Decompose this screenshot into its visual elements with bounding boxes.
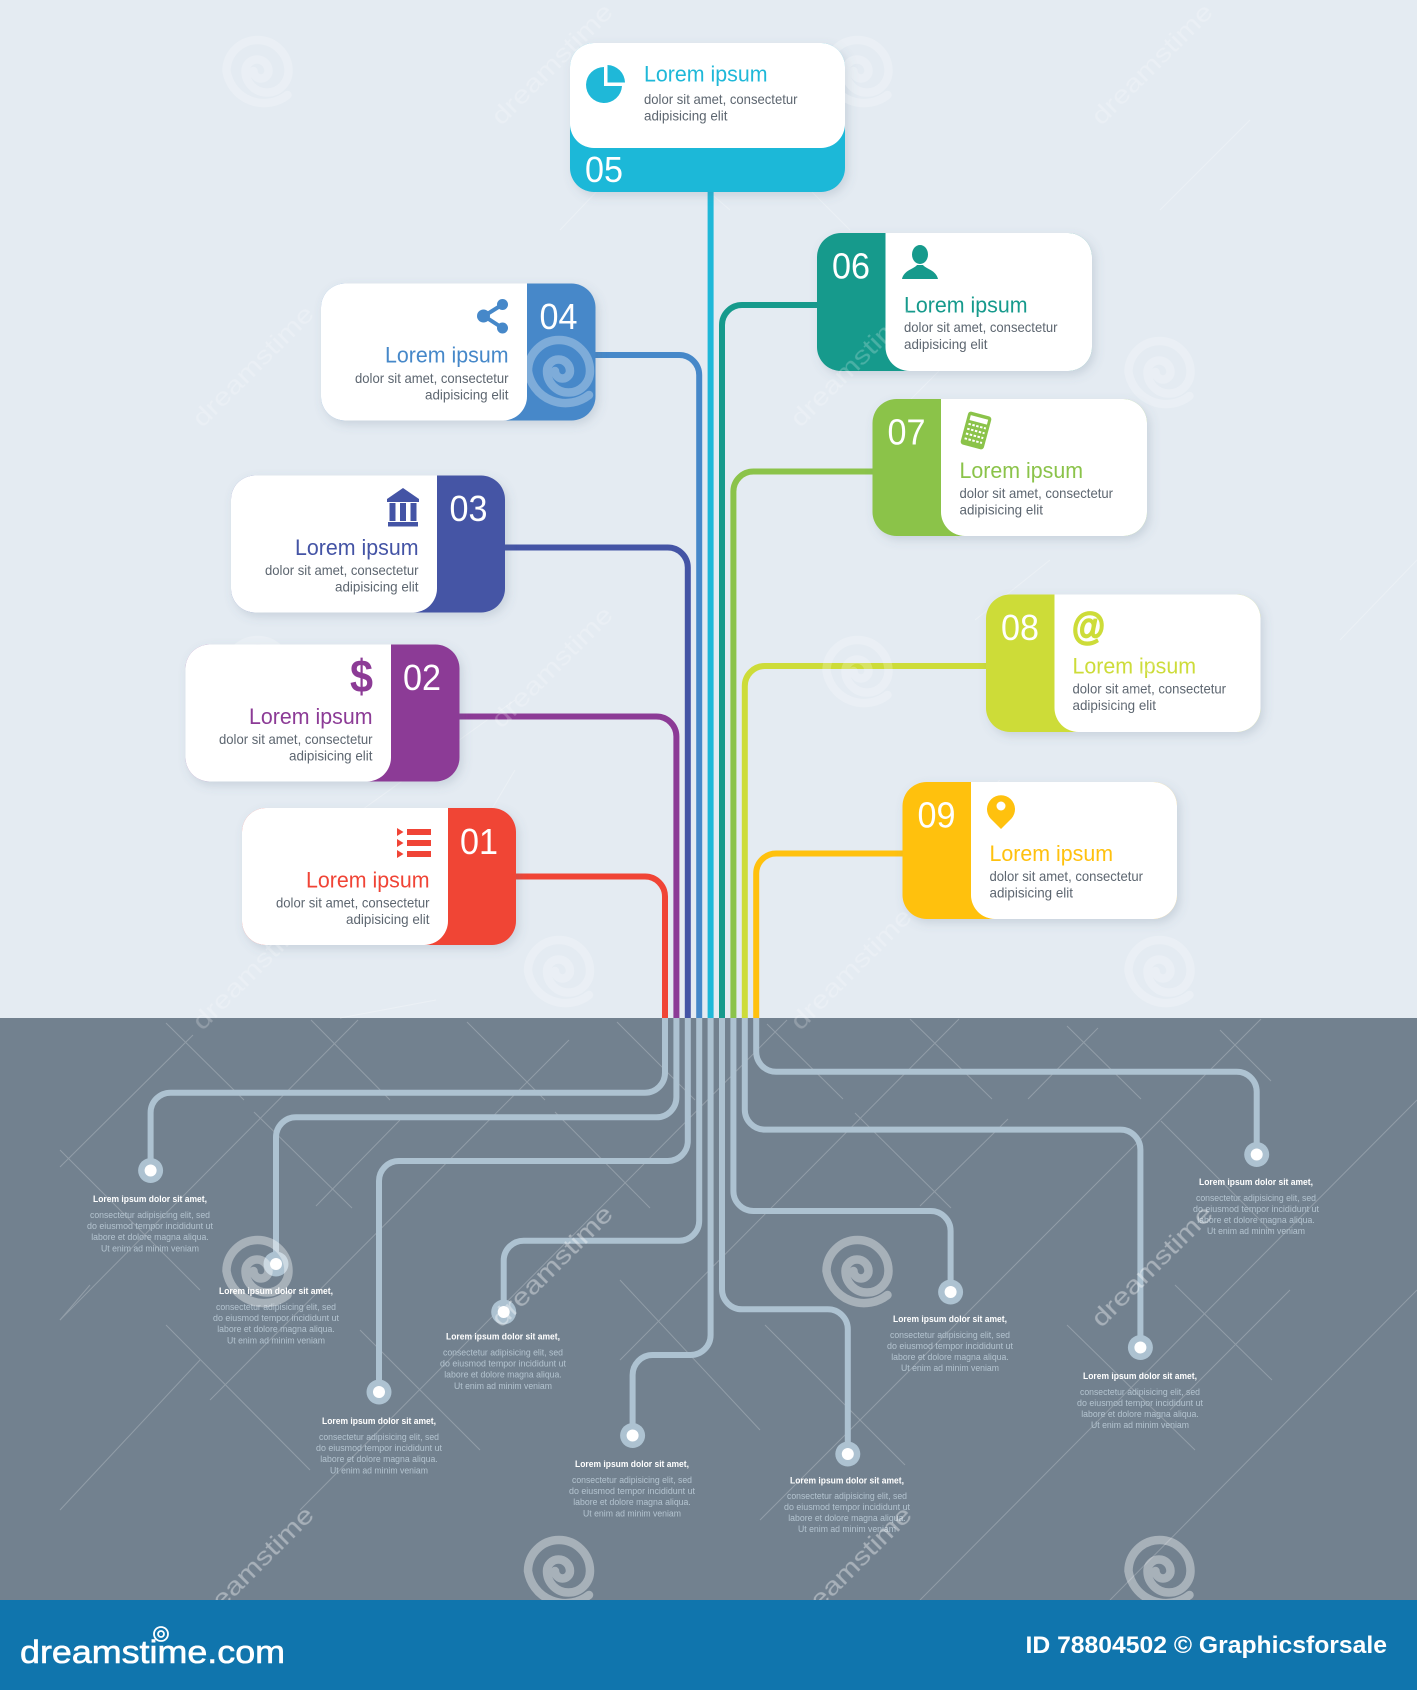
root 04	[504, 1018, 699, 1312]
icon: list	[397, 828, 431, 858]
card 06	[817, 233, 1092, 371]
root node 08 with caption	[1077, 1335, 1203, 1430]
root node 06 with caption: consectetur adipisicing elit, sed	[787, 1491, 907, 1501]
icon: calculator	[960, 411, 992, 450]
root node 09 with caption: consectetur adipisicing elit, sed	[1196, 1193, 1316, 1203]
icon: at sign: @	[1072, 606, 1105, 648]
watermark spirals	[226, 40, 1190, 1603]
root node 07 with caption: Lorem ipsum dolor sit amet,	[893, 1314, 1007, 1324]
branch 02	[455, 716, 676, 1018]
icon: dollar: $	[350, 650, 373, 702]
root node 08 with caption: Ut enim ad minim veniam	[1091, 1420, 1189, 1430]
watermark text: sky: dreamstime	[1086, 0, 1219, 131]
title: Lorem ipsum	[385, 342, 508, 368]
watermark text: sky: dreamstime	[1086, 601, 1219, 734]
root node 08 with caption: Lorem ipsum dolor sit amet,	[1083, 1371, 1197, 1381]
card 01: adipisicing elit	[346, 911, 430, 927]
root node 04 with caption: Lorem ipsum dolor sit amet,	[446, 1332, 560, 1342]
root node 08 with caption: do eiusmod tempor incididunt ut	[1077, 1398, 1203, 1408]
root node 04 with caption: Ut enim ad minim veniam	[454, 1381, 552, 1391]
description: dolor sit amet, consectetur	[355, 370, 509, 386]
icon: pie chart	[586, 65, 625, 103]
icon: map pin	[987, 795, 1015, 829]
icon: share	[477, 299, 508, 334]
root node 02 with caption: Ut enim ad minim veniam	[227, 1336, 325, 1346]
card 03: adipisicing elit	[335, 578, 419, 594]
root node 03 with caption: labore et dolore magna aliqua.	[320, 1454, 438, 1464]
root node 01 with caption: consectetur adipisicing elit, sed	[90, 1210, 210, 1220]
title: Lorem ipsum	[990, 841, 1113, 866]
watermark text: sky: dreamstime	[187, 903, 320, 1036]
root node 06 with caption: Ut enim ad minim veniam	[798, 1524, 896, 1534]
description: dolor sit amet, consectetur	[265, 562, 419, 578]
root node 07 with caption: Ut enim ad minim veniam	[901, 1363, 999, 1373]
watermark text: sky: dreamstime	[785, 903, 918, 1036]
root node 02 with caption	[213, 1252, 339, 1346]
root node 03 with caption: Ut enim ad minim veniam	[330, 1466, 428, 1476]
footer logo: dreamstime.com	[20, 1634, 285, 1670]
number: 09	[918, 794, 956, 836]
watermark text: sky: dreamstime	[785, 300, 918, 433]
watermark text: sky: dreamstime	[486, 601, 619, 734]
connector lines: branches to cards	[455, 190, 995, 1018]
branch 05	[708, 190, 714, 1018]
number: 08	[1001, 607, 1039, 648]
description: dolor sit amet, consectetur	[644, 91, 798, 107]
description: dolor sit amet, consectetur	[1072, 680, 1226, 696]
title: Lorem ipsum	[1072, 654, 1196, 678]
card 02	[186, 644, 460, 782]
root node 05 with caption: consectetur adipisicing elit, sed	[572, 1475, 692, 1485]
root node 05 with caption: labore et dolore magna aliqua.	[573, 1497, 691, 1507]
title: Lorem ipsum	[249, 704, 372, 729]
icon: bank	[387, 488, 419, 526]
root node 05 with caption: Lorem ipsum dolor sit amet,	[575, 1459, 689, 1469]
root node 09 with caption	[1193, 1142, 1319, 1236]
card 09: adipisicing elit	[990, 884, 1073, 900]
root node 04 with caption: do eiusmod tempor incididunt ut	[440, 1358, 566, 1368]
root 08	[745, 1018, 1140, 1347]
description: dolor sit amet, consectetur	[990, 868, 1143, 884]
root 03	[379, 1018, 688, 1392]
root node 06 with caption: Lorem ipsum dolor sit amet,	[790, 1476, 904, 1486]
description: dolor sit amet, consectetur	[219, 731, 373, 747]
root node 01 with caption: Lorem ipsum dolor sit amet,	[93, 1194, 207, 1204]
card 04: adipisicing elit	[425, 386, 509, 402]
root node 03 with caption: Lorem ipsum dolor sit amet,	[322, 1416, 436, 1426]
root node 06 with caption	[784, 1442, 910, 1534]
watermark text: ground: dreamstime	[785, 1501, 918, 1634]
number: 06	[832, 246, 870, 286]
card 06: adipisicing elit	[904, 336, 988, 352]
description: dolor sit amet, consectetur	[904, 319, 1058, 335]
root node 05 with caption	[569, 1423, 695, 1518]
root node 04 with caption: labore et dolore magna aliqua.	[444, 1370, 562, 1380]
root node 02 with caption: consectetur adipisicing elit, sed	[216, 1302, 336, 1312]
branch 01	[510, 876, 665, 1018]
root node 01 with caption	[87, 1158, 213, 1254]
root node 07 with caption: labore et dolore magna aliqua.	[891, 1352, 1009, 1362]
root node 02 with caption: Lorem ipsum dolor sit amet,	[219, 1286, 333, 1296]
root node 09 with caption: labore et dolore magna aliqua.	[1197, 1215, 1315, 1225]
root node 01 with caption: Ut enim ad minim veniam	[101, 1244, 199, 1254]
footer logo spiral	[154, 1627, 168, 1641]
watermark text: sky	[187, 0, 1219, 1036]
description: dolor sit amet, consectetur	[960, 485, 1113, 501]
card 09	[902, 782, 1177, 919]
root node 02 with caption: labore et dolore magna aliqua.	[217, 1324, 335, 1334]
root node 03 with caption	[316, 1380, 442, 1476]
card 04	[321, 284, 596, 420]
branch 03	[500, 548, 688, 1018]
branch 07	[733, 472, 880, 1018]
card 07: adipisicing elit	[960, 502, 1043, 518]
branch 08	[745, 666, 995, 1018]
title: Lorem ipsum	[904, 292, 1028, 318]
root node 07 with caption: consectetur adipisicing elit, sed	[890, 1330, 1010, 1340]
root node 01 with caption: labore et dolore magna aliqua.	[91, 1232, 209, 1242]
card 05	[570, 43, 845, 192]
card 07	[872, 399, 1147, 536]
icon: person	[902, 245, 938, 279]
card 01	[242, 808, 516, 945]
root node 04 with caption: consectetur adipisicing elit, sed	[443, 1348, 563, 1358]
root node 08 with caption: labore et dolore magna aliqua.	[1081, 1409, 1199, 1419]
card 03	[231, 476, 505, 612]
watermark text: ground: dreamstime	[1086, 1200, 1219, 1333]
root node 07 with caption: do eiusmod tempor incididunt ut	[887, 1341, 1013, 1351]
root node 05 with caption: do eiusmod tempor incididunt ut	[569, 1486, 695, 1496]
root 06	[722, 1018, 848, 1454]
description: dolor sit amet, consectetur	[276, 894, 430, 910]
background: ground	[0, 1018, 1417, 1600]
number: 07	[888, 412, 926, 452]
number: 01	[460, 821, 498, 862]
title: Lorem ipsum	[295, 535, 418, 560]
footer bar	[0, 1600, 1417, 1690]
number: 03	[450, 488, 488, 529]
root node 06 with caption: labore et dolore magna aliqua.	[788, 1513, 906, 1523]
watermark text: ground: dreamstime	[486, 1200, 619, 1333]
branch 04	[590, 355, 699, 1018]
root node 09 with caption: do eiusmod tempor incididunt ut	[1193, 1204, 1319, 1214]
root node 06 with caption: do eiusmod tempor incididunt ut	[784, 1502, 910, 1512]
watermark text: ground	[187, 1200, 1219, 1634]
watermark text: sky: dreamstime	[486, 0, 619, 131]
title: Lorem ipsum	[644, 62, 768, 86]
watermark text: sky: dreamstime	[187, 300, 320, 433]
root node 09 with caption: Ut enim ad minim veniam	[1207, 1226, 1305, 1236]
number: 02	[403, 657, 441, 698]
root 01	[151, 1018, 665, 1170]
root 07	[733, 1018, 951, 1292]
root node 05 with caption: Ut enim ad minim veniam	[583, 1508, 681, 1518]
root node 01 with caption: do eiusmod tempor incididunt ut	[87, 1221, 213, 1231]
card 05: adipisicing elit	[644, 108, 728, 124]
branch 06	[722, 305, 825, 1018]
title: Lorem ipsum	[306, 868, 430, 892]
root 02	[276, 1018, 676, 1264]
root node 09 with caption: Lorem ipsum dolor sit amet,	[1199, 1177, 1313, 1187]
root 05	[633, 1018, 711, 1436]
branch 09	[756, 854, 910, 1018]
background: sky	[0, 0, 1417, 1019]
root node 03 with caption: consectetur adipisicing elit, sed	[319, 1432, 439, 1442]
root lines	[151, 1018, 1257, 1454]
root node 08 with caption: consectetur adipisicing elit, sed	[1080, 1387, 1200, 1397]
decorative watermark grid lines	[60, 1019, 1417, 1600]
title: Lorem ipsum	[960, 458, 1083, 483]
root node 07 with caption	[887, 1280, 1013, 1373]
root node 04 with caption	[440, 1300, 566, 1391]
root 09	[756, 1018, 1257, 1155]
card 08: adipisicing elit	[1072, 697, 1156, 713]
watermark text: ground: dreamstime	[187, 1501, 320, 1634]
number: 04	[540, 296, 578, 337]
number: 05	[585, 149, 623, 190]
root node 02 with caption: do eiusmod tempor incididunt ut	[213, 1313, 339, 1323]
footer credit: ID 78804502 © Graphicsforsale	[1026, 1632, 1387, 1659]
card 02: adipisicing elit	[289, 748, 373, 764]
root node 03 with caption: do eiusmod tempor incididunt ut	[316, 1443, 442, 1453]
card 08	[986, 594, 1260, 732]
